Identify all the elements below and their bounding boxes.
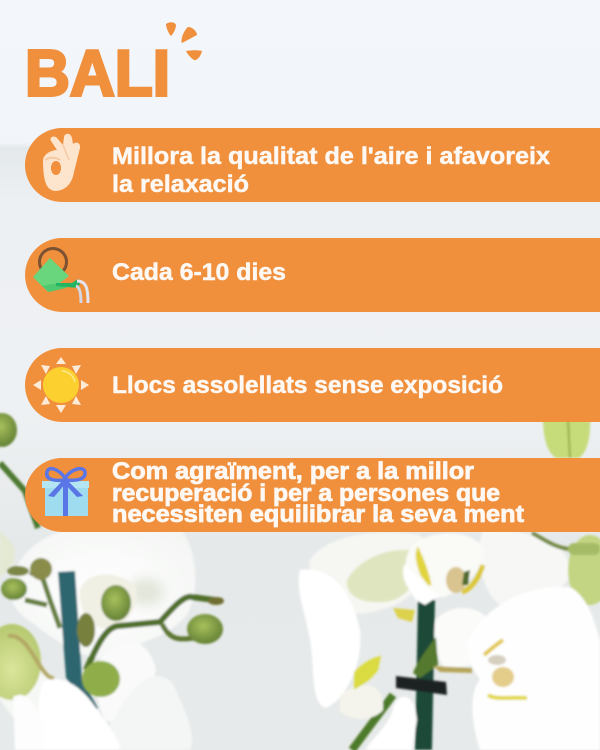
- text: occasions: recuperació i per a persones que: [112, 480, 500, 507]
- panel: light: [25, 348, 600, 422]
- text: air quality: Millora la qualitat de l'aire i afavoreix: [112, 143, 551, 170]
- title: BALI: BALI: [25, 36, 170, 110]
- text: air quality: [112, 143, 551, 198]
- text: occasions: Com agraïment, per a la millor: [112, 458, 474, 485]
- icon: ok hand: [43, 134, 80, 191]
- centre orchid: [403, 533, 484, 605]
- green stake: [415, 600, 435, 750]
- leaf on stake: [413, 637, 438, 678]
- blue stake: [58, 571, 98, 712]
- icon: watering can: [33, 248, 88, 303]
- icon: spark marks: [166, 22, 202, 60]
- text: occasions: [112, 458, 524, 528]
- panel: air quality: [25, 128, 600, 202]
- photo: orchid flowers: [0, 413, 600, 750]
- green leaf top right: [543, 418, 590, 458]
- text: air quality: la relaxació: [112, 171, 249, 198]
- big bud bottom left: [0, 624, 54, 700]
- right petals behind: [310, 530, 570, 622]
- white petal beside stake: [434, 608, 488, 668]
- front right orchid: [433, 587, 600, 750]
- white petals bottom left: [13, 679, 120, 750]
- left white orchid: [0, 528, 195, 750]
- right stem and green bud: [532, 533, 600, 605]
- text: light: Llocs assolellats sense exposició: [112, 372, 503, 399]
- left large petal: [299, 569, 417, 750]
- text: occasions: necessiten equilibrar la seva ment: [112, 501, 524, 528]
- text: watering: Cada 6-10 dies: [112, 259, 286, 286]
- clip: [396, 676, 447, 695]
- icon: sun: [33, 357, 89, 413]
- left stem and top bud: [0, 413, 38, 528]
- panel: watering: [25, 238, 600, 312]
- lower stem: [352, 695, 393, 750]
- icon: gift: [42, 469, 89, 516]
- left bud cluster: [1, 558, 131, 647]
- panel: occasions: [25, 458, 600, 532]
- right branch with buds: [82, 597, 224, 697]
